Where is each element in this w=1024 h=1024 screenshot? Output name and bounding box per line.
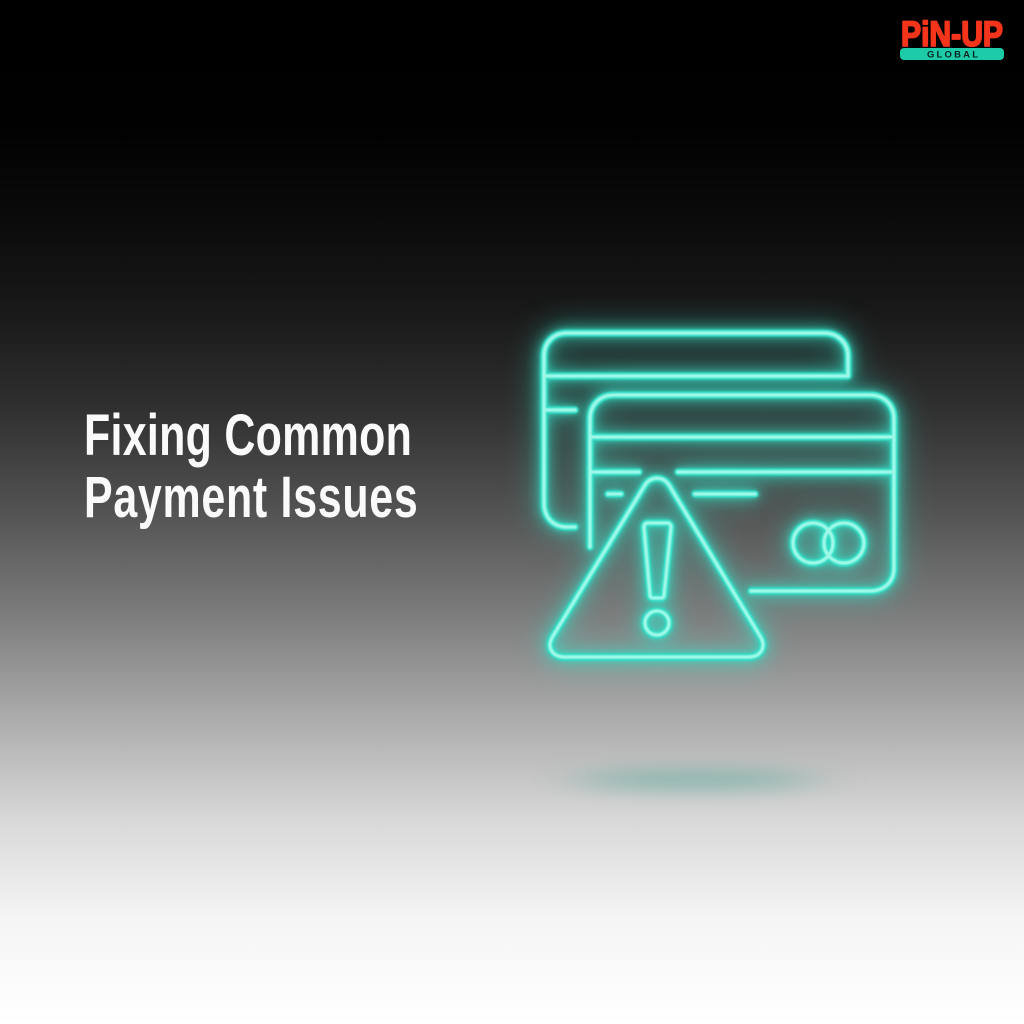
title line 2: Payment Issues	[84, 465, 418, 530]
icon shadow on floor	[575, 769, 815, 791]
back card	[544, 333, 848, 527]
card chip circles	[793, 523, 864, 563]
exclamation mark	[644, 523, 671, 635]
warning triangle	[550, 478, 763, 657]
front card	[590, 395, 894, 591]
logo subtitle: GLOBAL	[927, 50, 978, 60]
title	[84, 403, 418, 530]
neon tube bright core	[544, 333, 894, 657]
logo: Pin-Up Global	[900, 15, 1004, 60]
logo green bar	[900, 48, 1004, 60]
title line 1: Fixing Common	[84, 403, 412, 468]
logo wordmark: PiN-UP	[901, 15, 1003, 54]
neon icon: credit cards with warning	[544, 333, 894, 657]
